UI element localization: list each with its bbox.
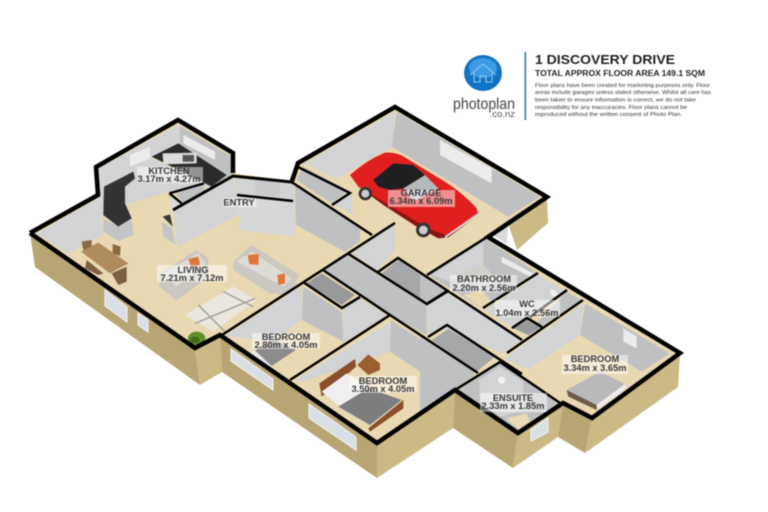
label: living: LIVING [178,265,208,275]
title block: TOTAL APPROX FLOOR AREA 149.1 SQM [535,69,705,78]
plant [188,332,205,345]
label: bedroom 2.80 [252,332,320,350]
label: living [157,265,227,283]
wall face [37,198,103,253]
title block: 1 DISCOVERY DRIVE [535,53,675,67]
label: bedroom 3.50: BEDROOM [359,376,408,386]
label: bedroom 3.50: 3.50m x 4.05m [351,384,415,394]
label: bedroom 2.80: BEDROOM [262,332,311,342]
divider [524,52,526,120]
label: bathroom: 2.20m x 2.56m [452,283,516,293]
bedroom two faces [293,320,475,442]
dining table [81,240,128,285]
ensuite [458,363,557,431]
label: kitchen: 3.17m x 4.27m [137,174,201,184]
bedroom one bed [249,340,296,367]
room: bedroom one and two [225,287,475,442]
garage wall faces [297,112,540,217]
entry walls [173,178,295,247]
label: garage: 6.34m x 6.09m [389,196,453,206]
label: ensuite: ENSUITE [493,393,533,403]
label: wc: WC [519,299,535,309]
house floor [30,107,680,443]
label: bedroom 3.34: 3.34m x 3.65m [563,363,627,373]
label: garage [388,188,455,207]
label: living: 7.21m x 7.12m [160,273,224,283]
room: ensuite and bedroom three [420,303,670,431]
black wall tops [30,107,680,443]
label: entry: ENTRY [223,198,255,208]
label: kitchen: KITCHEN [148,166,190,176]
label: ensuite [480,393,547,412]
bedroom three bed [567,372,626,410]
room: living north wall [37,198,103,253]
logo: photoplan: photoplan [453,96,515,113]
title block: reproduced without the written consent of Photo Plan. [535,112,682,118]
room: bathroom and wc [428,238,582,335]
label: bedroom 3.50 [350,376,417,394]
red car [350,153,478,238]
title block: Floor plans have been created for marketing purposes only. Floor [535,83,710,89]
sofa two [233,245,299,295]
label: bathroom: BATHROOM [457,274,511,284]
label: bedroom 2.80: 2.80m x 4.05m [254,340,318,350]
label: bathroom [450,274,517,293]
bedroom one faces [225,287,343,377]
title block: responsibility for any inaccuracies. Floor plans cannot be [535,105,687,111]
rug [185,287,257,332]
room: kitchen and entry [98,125,295,247]
label: ensuite: 2.33m x 1.85m [481,401,545,411]
title block [535,53,712,118]
title block: areas include garages unless stated otherwise. Whilst all care has [535,90,712,96]
room: living furniture [81,186,360,345]
hall west walls [307,225,450,343]
kitchen nook [162,183,207,245]
bedroom two bed and nightstand [319,354,403,432]
label: garage: GARAGE [401,188,441,198]
room: garage [297,112,540,238]
label: bedroom 3.34 [562,354,628,374]
room labels [137,166,628,412]
kitchen counters [103,143,227,241]
label: kitchen [137,166,203,184]
title block: been taken to ensure information is correct, we do not take [535,98,696,104]
hall east walls [420,272,522,372]
wc and closet [485,275,582,335]
sofa one [159,250,208,301]
label: wc: 1.04m x 2.56m [495,308,559,318]
logo: photoplan [453,55,515,120]
logo: photoplan: .co.nz [490,109,515,120]
corridor south wall [420,335,475,413]
kitchen walls [98,125,232,218]
entry north east wall [295,186,360,252]
bathroom [428,238,538,308]
windows in foundation [105,290,548,450]
label: wc [495,299,560,318]
bedroom three faces [505,303,670,417]
foundation walls [30,197,680,478]
label: bedroom 3.34: BEDROOM [571,354,620,364]
